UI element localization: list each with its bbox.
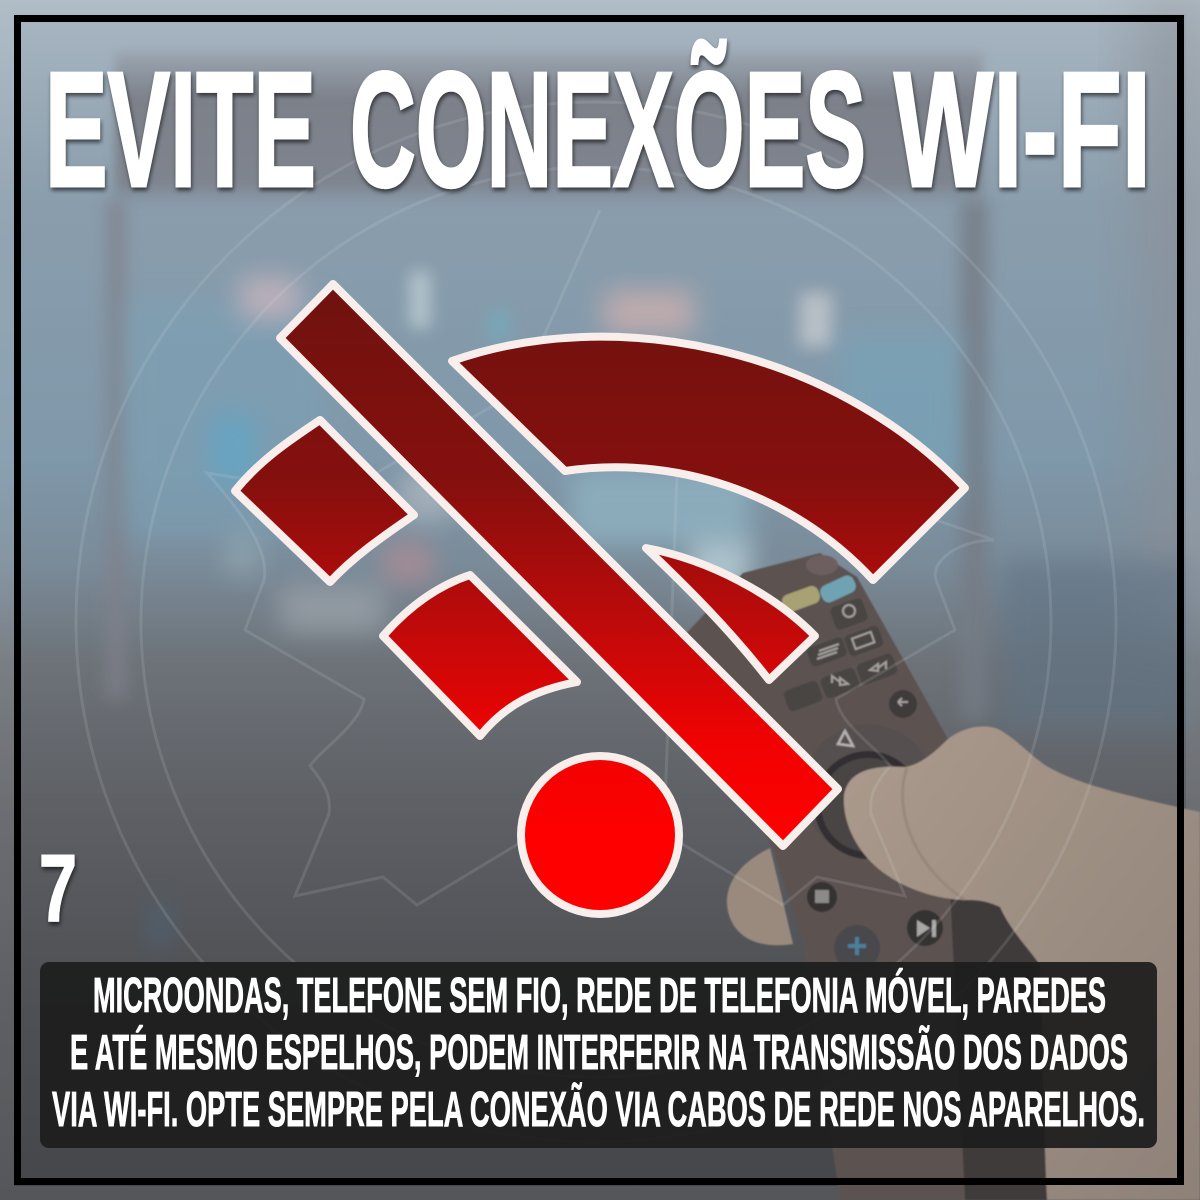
text panel — [40, 962, 1157, 1148]
title — [45, 38, 1151, 221]
hand: finger crease — [903, 768, 965, 900]
wifi: center dot — [521, 756, 679, 914]
remote control and hand photo — [680, 553, 1200, 1200]
wifi: lower-left block — [383, 575, 577, 736]
remote: lower buttons — [807, 882, 837, 912]
remote body — [680, 553, 1065, 1200]
remote: colored buttons — [780, 573, 858, 614]
wifi: slash bar — [280, 284, 838, 846]
wifi: outer arc — [452, 337, 965, 580]
remote: navigation ring — [802, 724, 934, 856]
hand: thumb underside — [727, 848, 793, 945]
watermark: faint emblem outline — [76, 102, 1116, 1142]
icon: crossed-out wifi — [235, 284, 965, 914]
wifi: upper-left block — [235, 420, 414, 582]
remote: dark lower section — [950, 890, 1065, 1200]
remote: triangle glyph — [838, 731, 853, 746]
remote: button rows — [782, 597, 917, 718]
remote: button glyphs — [817, 605, 908, 706]
step number: 7 — [39, 835, 77, 942]
title: EVITE — [45, 38, 316, 221]
wifi: middle-right arc — [646, 548, 815, 680]
remote: power button — [806, 555, 838, 575]
hand — [844, 726, 1200, 1200]
